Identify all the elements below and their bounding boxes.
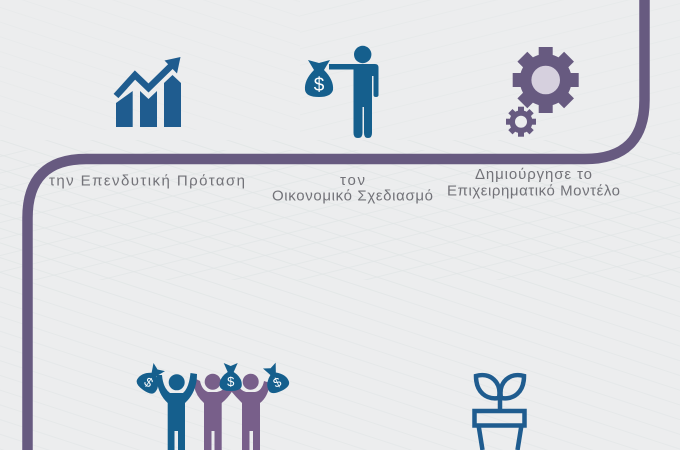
bag left: $ bbox=[141, 374, 157, 391]
bag right bbox=[259, 361, 291, 396]
blue person bbox=[157, 373, 197, 450]
icon: plant in pot bbox=[474, 375, 524, 450]
icon: growth chart bbox=[116, 57, 181, 127]
label: financial planning: Οικονομικό Σχεδιασμό bbox=[272, 188, 433, 204]
icon: person holding money bag bbox=[305, 46, 378, 138]
bag middle bbox=[220, 363, 242, 391]
icon: three people with money bags bbox=[134, 361, 291, 450]
label: financial planning: τον bbox=[340, 172, 365, 189]
small gear bbox=[506, 107, 536, 137]
label: business model bbox=[447, 166, 620, 200]
label: business model: Επιχειρηματικό Μοντέλο bbox=[447, 182, 620, 200]
bag left bbox=[134, 361, 168, 396]
icon: person holding money bag: $ bbox=[314, 75, 325, 96]
purple person right bbox=[231, 374, 270, 450]
label: business model: Δημιούργησε το bbox=[475, 166, 592, 183]
bag right: $ bbox=[271, 374, 284, 391]
label: financial planning bbox=[272, 172, 433, 204]
label: investment proposal: την Επενδυτική Πρόταση bbox=[49, 172, 245, 190]
large gear bbox=[513, 47, 579, 113]
bag middle: $ bbox=[227, 374, 235, 389]
purple person middle bbox=[194, 374, 233, 450]
icon: gears bbox=[506, 47, 579, 137]
